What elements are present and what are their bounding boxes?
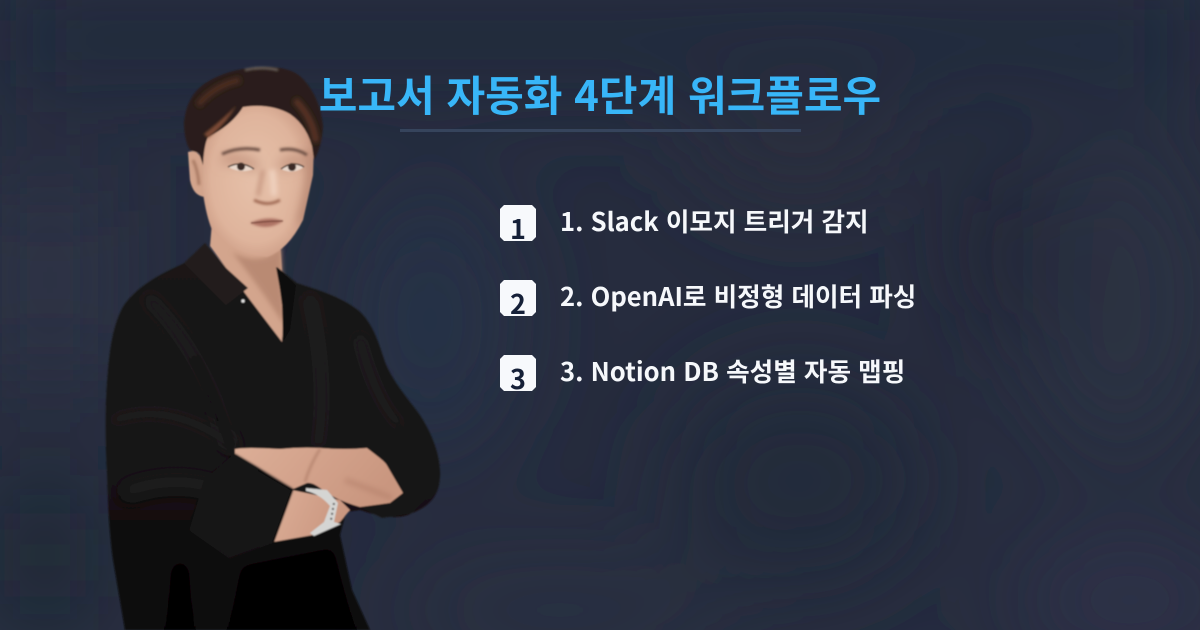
badge 3	[500, 355, 536, 391]
panel: slide background	[105, 66, 1158, 630]
hair	[184, 67, 323, 165]
step 1 label: 1. Slack 이모지 트리거 감지	[560, 202, 869, 239]
person photo illustration	[105, 66, 441, 630]
title: 보고서 자동화 4단계 워크플로우	[319, 63, 881, 124]
step 3 label: 3. Notion DB 속성별 자동 맵핑	[560, 352, 905, 389]
step 3	[500, 352, 905, 391]
step 1	[500, 202, 869, 241]
badge 1: 1	[510, 208, 526, 247]
eyebrows	[222, 149, 260, 154]
ear	[188, 151, 205, 197]
eyes	[228, 164, 254, 171]
left sleeve cuff	[190, 454, 293, 558]
collar	[184, 243, 248, 305]
shirt body	[106, 243, 440, 630]
watch band	[306, 488, 341, 536]
step 2 label: 2. OpenAI로 비정형 데이터 파싱	[560, 277, 916, 314]
lower forearm	[273, 490, 350, 542]
mouth	[250, 218, 283, 227]
face	[203, 99, 314, 257]
step 2	[500, 277, 916, 316]
face shading	[222, 150, 312, 225]
title underline	[400, 129, 801, 132]
nose	[254, 200, 280, 204]
right sleeve cuff	[362, 425, 439, 518]
badge 2	[500, 280, 536, 316]
neck	[210, 222, 288, 342]
badge 1	[500, 205, 536, 241]
upper forearm and fist	[235, 448, 403, 507]
shirt folds	[110, 290, 359, 630]
badge 3: 3	[510, 358, 526, 397]
badge 2: 2	[510, 283, 526, 322]
